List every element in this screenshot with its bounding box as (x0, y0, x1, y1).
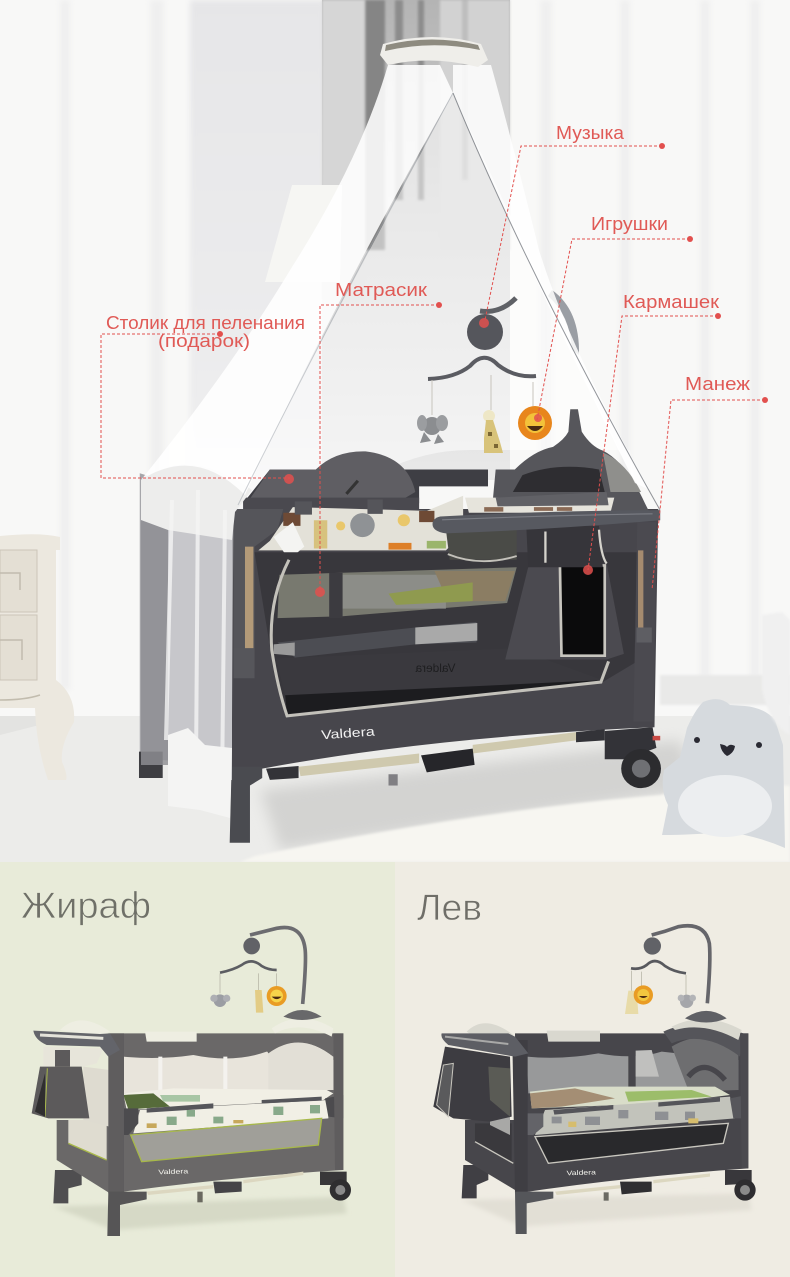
label: music: Музыка (556, 123, 625, 143)
end post (740, 1033, 748, 1168)
net left drape (141, 65, 453, 495)
giraffe toy (625, 991, 638, 1014)
net back mesh left (141, 480, 170, 765)
folded pad (60, 1020, 110, 1035)
callout line: playpen (652, 400, 765, 590)
side panel (57, 1120, 110, 1193)
lion toy (518, 406, 552, 440)
logo: Valdera (566, 1169, 596, 1177)
room background (0, 0, 790, 862)
crib: lion (433, 926, 756, 1234)
front frame panel (232, 509, 658, 776)
organizer (43, 1047, 103, 1067)
back leg (462, 1165, 488, 1198)
mobile pole (250, 927, 305, 1004)
callout line: toys (537, 239, 690, 420)
elephant toy (417, 415, 448, 444)
elephant toy (210, 994, 230, 1007)
side toy at right edge (762, 612, 790, 735)
mattress rails (553, 1097, 720, 1115)
mosquito net (141, 37, 660, 818)
right post (633, 522, 656, 722)
wheel assembly (320, 1172, 351, 1201)
end hump arch (688, 1067, 725, 1080)
mobile hanger (428, 358, 536, 379)
interior (255, 552, 637, 716)
far mattress through mesh (278, 567, 517, 618)
crib main (139, 409, 661, 843)
folded pad (467, 1023, 513, 1042)
upper mesh (123, 1052, 333, 1093)
lion toy (634, 985, 653, 1005)
pocket (32, 1067, 89, 1118)
front leg (515, 1192, 553, 1234)
organizer (433, 1047, 512, 1122)
label: playpen: Манеж (685, 374, 750, 394)
callout line: mattress (320, 305, 439, 592)
end hump mesh (672, 1037, 738, 1090)
left post (234, 509, 283, 669)
back left leg (139, 752, 163, 778)
tray inner highlight (442, 514, 653, 520)
upper side mesh (83, 1067, 109, 1127)
print motifs (350, 513, 375, 537)
window piping (271, 560, 609, 716)
label: gift: (подарок) (158, 331, 250, 351)
bag on far side (513, 467, 605, 492)
mobile hanger (220, 961, 277, 973)
panel: lion variant (395, 862, 790, 1277)
label: changing table: Столик для пеленания (106, 313, 305, 333)
net lower hem (168, 728, 232, 818)
mattress top (123, 1088, 333, 1110)
tray (441, 1033, 528, 1057)
print dots (167, 1105, 320, 1125)
crib: giraffe (32, 927, 351, 1236)
end hump band (663, 1025, 743, 1057)
front panel (110, 1033, 343, 1193)
label: mattress: Матрасик (335, 280, 427, 300)
print strip far side (465, 498, 614, 513)
right hinge (730, 1095, 747, 1118)
variant title: Жираф (21, 885, 151, 926)
net crown (380, 37, 488, 67)
end post (333, 1033, 343, 1170)
hanging pocket (505, 564, 624, 659)
hanging strings (220, 973, 277, 993)
crib back wall (276, 648, 603, 695)
front post (108, 1033, 124, 1193)
left hinge (518, 1113, 543, 1135)
tray (33, 1031, 120, 1057)
upper rail (243, 469, 488, 503)
mobile ball (644, 937, 661, 955)
floor shadow (462, 1193, 752, 1227)
hump print (272, 1018, 333, 1037)
mattress top (530, 1087, 730, 1108)
organizer under tray (526, 526, 603, 567)
wheel assembly (605, 727, 661, 788)
mobile arm (480, 298, 516, 311)
print dots (552, 1110, 695, 1125)
right hinge (325, 1095, 343, 1118)
canopy hump (548, 290, 579, 355)
mattress rails (147, 1097, 322, 1113)
far end print (603, 453, 641, 492)
floor shadow (53, 1197, 347, 1230)
side mesh (68, 1120, 107, 1160)
tray (433, 510, 660, 533)
net seams (238, 93, 453, 505)
net right drape (453, 65, 650, 490)
callout line: changing table (101, 334, 290, 478)
pouch (213, 1182, 242, 1193)
folded rail (496, 492, 609, 506)
pocket opening (560, 565, 605, 656)
panel: room scene with crib (0, 0, 790, 862)
label: pocket: Кармашек (623, 292, 719, 312)
mobile base (283, 1010, 322, 1020)
hump print (672, 1019, 742, 1040)
front panel (515, 1033, 748, 1193)
mobile pole (652, 926, 710, 1003)
center pouch (421, 749, 475, 772)
rail in crib (278, 622, 477, 658)
left hinge (115, 1108, 138, 1135)
net center veil (237, 93, 635, 500)
table lamp (265, 185, 342, 282)
top print flap (547, 1031, 600, 1042)
crib floor (285, 680, 603, 714)
panel background (395, 862, 790, 1277)
front leg (107, 1192, 147, 1236)
pouch (620, 1182, 652, 1194)
panel background (0, 862, 395, 1277)
top print flap (145, 1032, 197, 1042)
print strip front (258, 496, 463, 550)
mobile hanger (631, 961, 686, 973)
net mesh right (168, 505, 232, 780)
front post (512, 1040, 528, 1193)
front leg (230, 767, 262, 843)
center foot (604, 1192, 609, 1201)
lower mesh (131, 1118, 322, 1162)
net folds (166, 490, 225, 790)
elephant toy (678, 995, 696, 1008)
variant title: Лев (417, 887, 482, 928)
upper mesh (527, 1052, 738, 1093)
crib back end (140, 473, 235, 763)
plush bunny (662, 699, 785, 848)
callouts (101, 146, 765, 592)
lion toy (267, 986, 287, 1006)
base bars (147, 1172, 303, 1195)
callout line: music (485, 146, 662, 320)
side mesh (475, 1123, 512, 1162)
center leg (389, 774, 398, 786)
hanging strings (432, 375, 533, 415)
nightstand (0, 534, 74, 780)
callout dots (217, 143, 768, 597)
logo: Valdera (158, 1168, 189, 1176)
wheel assembly (725, 1170, 756, 1201)
organizer stem (55, 1050, 70, 1067)
mobile ball (467, 314, 503, 350)
mobile base (685, 1011, 727, 1022)
base bars (555, 1173, 710, 1195)
logo: Valdera (321, 724, 376, 742)
end hump mesh (268, 1042, 333, 1090)
far side top area (492, 409, 649, 511)
center foot (197, 1192, 203, 1202)
label: toys: Игрушки (591, 214, 668, 234)
callout labels (106, 123, 750, 394)
floor rug (240, 784, 790, 862)
changing pad hump (247, 451, 415, 503)
mobile ball (243, 938, 260, 954)
callout line: pocket (588, 316, 718, 570)
mirrored logo: Valdera (415, 662, 455, 675)
giraffe toy (483, 410, 503, 453)
giraffe toy (255, 990, 263, 1013)
net top print (141, 465, 252, 540)
lower mesh (535, 1123, 728, 1163)
mobile (417, 298, 552, 453)
mattress front (535, 1097, 735, 1135)
panel: giraffe variant (0, 862, 395, 1277)
rail under pad (243, 498, 419, 518)
left hinge (234, 648, 255, 678)
clips (295, 500, 383, 515)
end hump band (267, 1034, 333, 1057)
base bar (299, 754, 419, 776)
mattress front (133, 1100, 328, 1133)
hanging strings (632, 971, 686, 995)
back leg (53, 1170, 82, 1203)
side panel (465, 1120, 515, 1190)
